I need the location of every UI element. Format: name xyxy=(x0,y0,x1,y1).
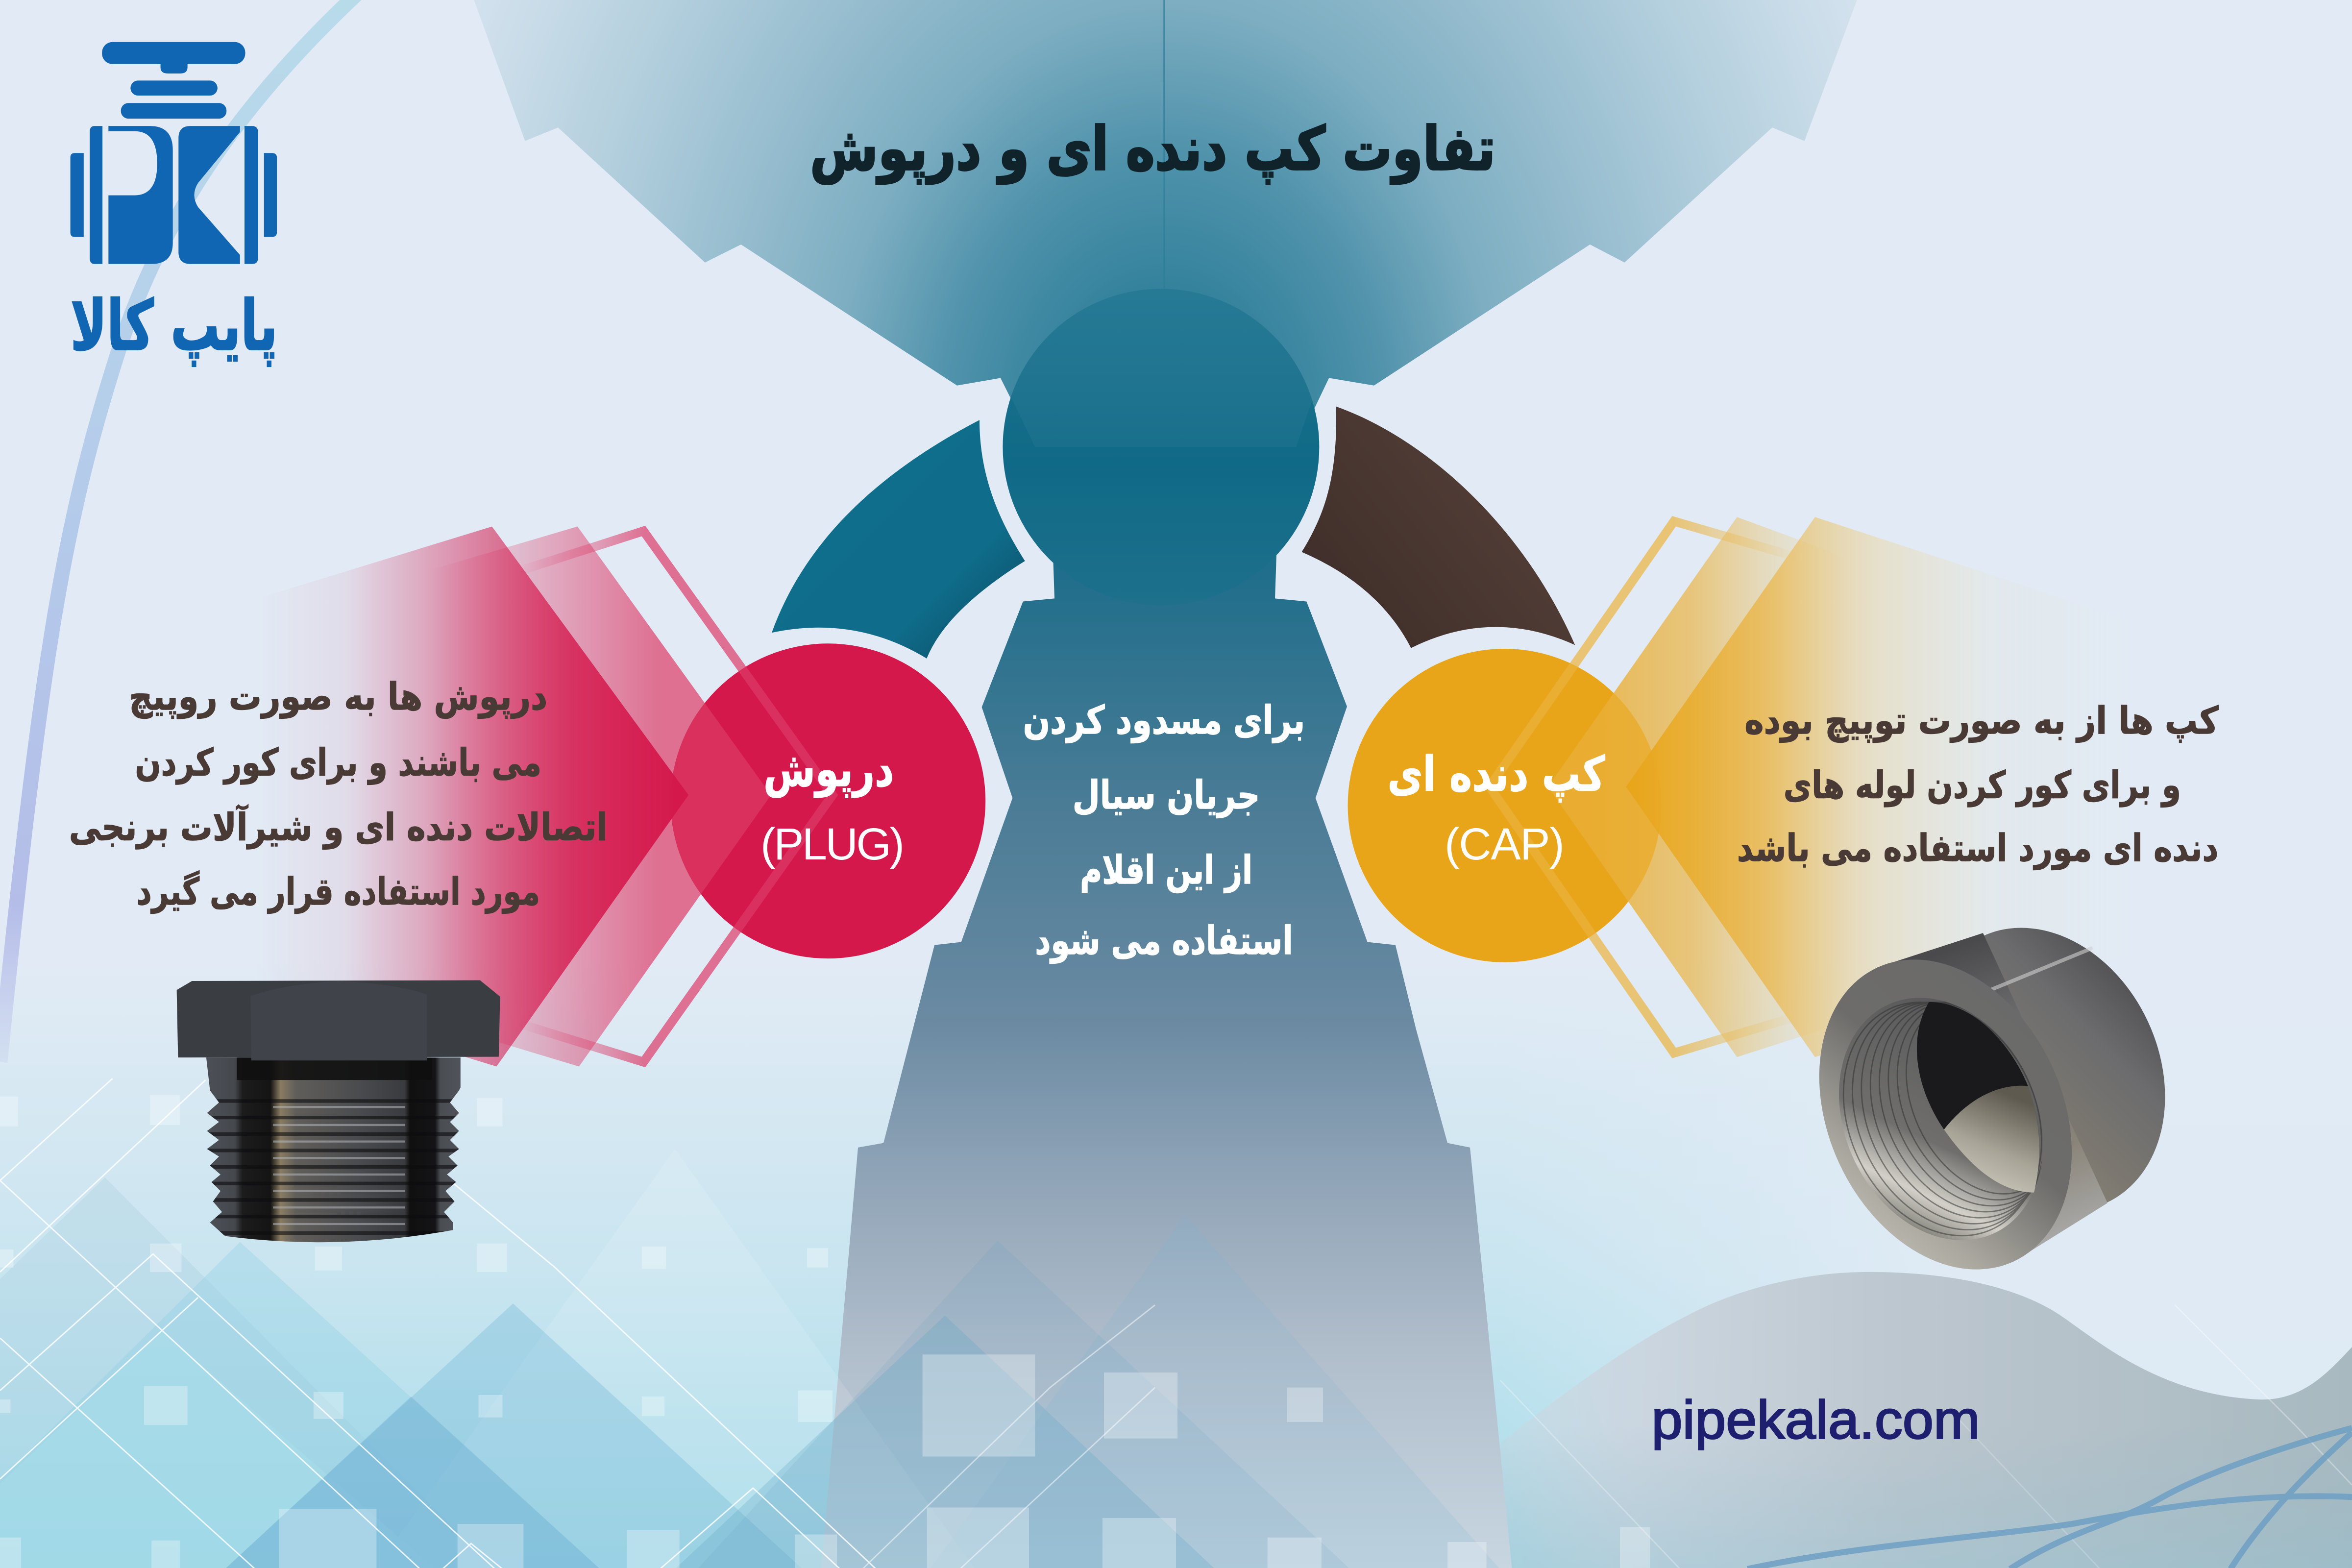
red circle xyxy=(670,643,985,958)
plug circle label xyxy=(760,742,905,869)
logo xyxy=(71,42,277,367)
yellow chevron front xyxy=(1626,517,2160,1057)
plug line 1: درپوش ها به صورت روپیچ xyxy=(129,675,547,719)
center line 3: از این اقلام xyxy=(1080,847,1252,893)
plug text block xyxy=(69,675,608,914)
cap line 3: دنده ای مورد استفاده می باشد xyxy=(1737,827,2219,870)
blue curves bottom right xyxy=(1747,1428,2352,1568)
red chevron back xyxy=(420,526,771,1067)
yellow chevron back xyxy=(1548,517,1853,1057)
plug photo xyxy=(177,980,500,1242)
cap line 1: کپ ها از به صورت توپیچ بوده xyxy=(1744,699,2219,743)
background white lines xyxy=(0,1078,2352,1568)
background squares xyxy=(0,1095,1650,1568)
red chevron front xyxy=(150,526,688,1067)
cap text block xyxy=(1737,699,2219,870)
cap body xyxy=(1877,888,2210,1261)
cap dark bore xyxy=(1917,1002,2028,1129)
cap line 2: و برای کور کردن لوله های xyxy=(1784,764,2181,808)
website url: pipekala.com xyxy=(1651,1390,1980,1450)
yellow outline chevron xyxy=(1490,521,1800,1053)
title: تفاوت کپ دنده ای و درپوش xyxy=(810,114,1495,185)
cap circle label xyxy=(1388,746,1605,869)
cap english name: (CAP) xyxy=(1445,819,1565,869)
background triangles xyxy=(0,1149,1500,1568)
right yellow chevrons xyxy=(1490,517,2160,1057)
plug line 2: می باشند و برای کور کردن xyxy=(135,741,541,785)
plug hex head xyxy=(177,980,500,1057)
logo wordmark: پایپ کالا xyxy=(71,286,277,367)
teal arc xyxy=(772,420,1025,659)
plug persian name: درپوش xyxy=(763,742,894,798)
top fan xyxy=(474,0,1857,447)
cap thread lines xyxy=(1807,970,2089,1268)
grey hill xyxy=(1425,1272,2352,1568)
center text block xyxy=(1023,697,1305,964)
central column xyxy=(821,554,1512,1568)
yellow circle xyxy=(1348,649,1661,962)
center line 2: جریان سیال xyxy=(1073,772,1260,818)
center line 1: برای مسدود کردن xyxy=(1023,697,1305,743)
plug hex centre face xyxy=(250,981,427,1060)
plug line 4: مورد استفاده قرار می گیرد xyxy=(137,870,540,914)
brown arc xyxy=(1302,407,1575,648)
center line 4: استفاده می شود xyxy=(1035,918,1293,964)
plug english name: (PLUG) xyxy=(760,819,905,869)
cap inner thread xyxy=(1801,964,2081,1274)
background arc xyxy=(0,0,360,1062)
plug thread body xyxy=(206,1057,461,1242)
central circle xyxy=(1003,289,1319,563)
left red chevrons xyxy=(150,526,833,1067)
plug line 3: اتصالات دنده ای و شیرآلات برنجی xyxy=(69,804,608,849)
cap front ring xyxy=(1771,918,2120,1311)
cap highlight xyxy=(1983,948,2092,993)
cap floor xyxy=(1944,1086,2039,1193)
cap photo xyxy=(1819,928,2165,1270)
red outline chevron xyxy=(517,531,833,1062)
cap persian name: کپ دنده ای xyxy=(1388,746,1605,802)
